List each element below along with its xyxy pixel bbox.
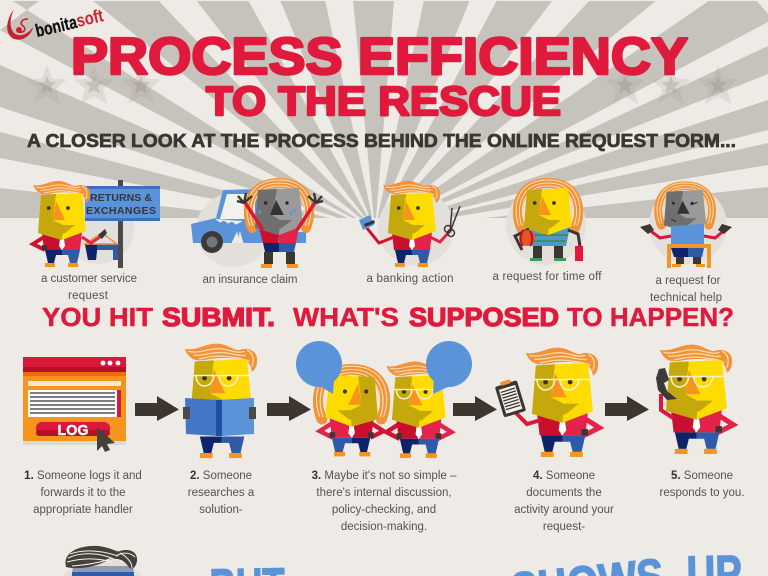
caption 5: technical help (650, 292, 722, 304)
caption 1: a customer service (41, 273, 137, 285)
bottom character: gray hair head (63, 546, 141, 576)
logo: bonitasoft (7, 5, 105, 41)
step 3 caption: 3. (312, 470, 321, 482)
speech bubble left (296, 341, 342, 394)
step 3 caption: there's internal discussion, (316, 487, 452, 499)
phone (656, 368, 677, 400)
step 2 caption: 2. (190, 470, 200, 482)
step 5 caption: responds to you. (659, 487, 745, 499)
step 3 woman with speech bubble (296, 341, 387, 456)
step 3 caption: policy-checking, and (332, 504, 436, 516)
scenario 4: request for time off (506, 180, 586, 265)
step 3 man with speech bubble (386, 341, 472, 458)
step 4 caption: 4. (533, 470, 543, 482)
step 4 character with clipboard (494, 348, 599, 457)
stars left (27, 65, 161, 104)
step 1 caption: forwards it to the (40, 487, 126, 499)
step 2 caption: Someone (200, 470, 252, 482)
speech bubble right (426, 341, 472, 394)
step 5 character on phone (656, 345, 733, 454)
step 1 caption: Someone logs it and (34, 470, 142, 482)
scenario 1: customer service character with sign (33, 180, 160, 268)
section heading: WHAT'S (293, 302, 399, 332)
section heading: TO HAPPEN? (567, 302, 734, 332)
title: PROCESS EFFICIENCY (71, 28, 688, 86)
sunburst background rays (0, 0, 768, 240)
caption 3: a banking action (366, 273, 454, 285)
step 2 caption: solution- (199, 504, 243, 516)
step 4 caption: activity around your (514, 504, 614, 516)
step 4 caption: Someone (543, 470, 595, 482)
section heading: YOU HIT (42, 302, 153, 332)
title: TO THE RESCUE (206, 78, 561, 124)
step 4 caption: documents the (526, 487, 602, 499)
scenario 1: customer service character with sign: EXCHANGES (86, 205, 156, 217)
stars right (605, 65, 738, 104)
caption 1 (41, 273, 137, 302)
caption 5 (650, 275, 722, 304)
step 4 caption: request- (543, 521, 585, 533)
step 5 caption: 5. (671, 470, 681, 482)
scenario 2: insurance claim (191, 180, 323, 268)
step 1 icon: log window (23, 357, 126, 452)
logo: bonitasoft: soft (74, 5, 105, 31)
section heading: SUPPOSED (409, 302, 559, 332)
scenario 3: banking action (359, 181, 460, 267)
caption 2: an insurance claim (202, 274, 298, 286)
caption 1: request (68, 290, 109, 302)
logo: bonitasoft: bonita (33, 12, 80, 41)
clipboard (494, 377, 526, 418)
arrow 3 (453, 396, 497, 421)
subtitle: A CLOSER LOOK AT THE PROCESS BEHIND THE ONLINE REQUEST FORM... (27, 131, 736, 151)
step 1 caption: appropriate handler (33, 504, 133, 516)
arrow 1 (135, 396, 179, 421)
step 5 caption: Someone (681, 470, 733, 482)
step 3 caption: decision-making. (341, 521, 427, 533)
step 3 caption: Maybe it's not so simple – (321, 470, 457, 482)
arrow 2 (267, 396, 311, 421)
step 1 icon: log window: LOG (58, 422, 88, 439)
section heading: SUBMIT. (162, 302, 275, 332)
step 1 caption: 1. (24, 470, 34, 482)
arrow 4 (605, 396, 649, 421)
title (71, 28, 688, 124)
caption 5: a request for (656, 275, 721, 287)
step 2 character reading a book (183, 344, 257, 458)
section heading (42, 302, 734, 332)
caption 4: a request for time off (492, 271, 602, 283)
step 2 caption: researches a (188, 487, 255, 499)
scenario 5: technical help (640, 183, 732, 268)
scenario 1: customer service character with sign: RETURNS & (90, 192, 152, 204)
